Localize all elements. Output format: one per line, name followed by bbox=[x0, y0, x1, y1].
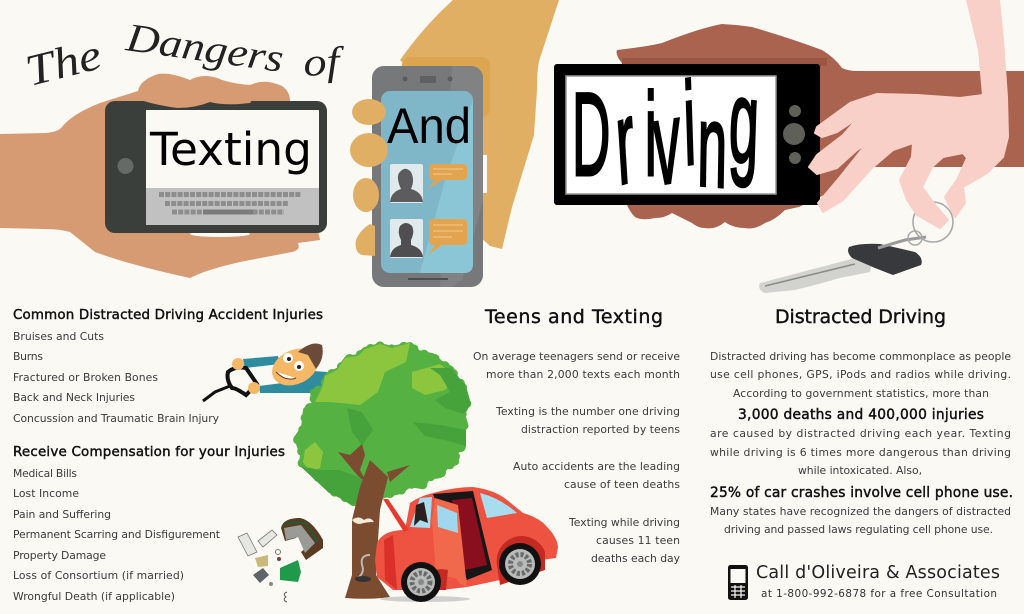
panel: teens and texting bbox=[473, 306, 681, 565]
text block: distracted driving intro bbox=[710, 350, 1011, 400]
contact: woman with message bbox=[390, 164, 467, 203]
keyboard bbox=[159, 194, 301, 212]
illustration: tree and crashed car bbox=[297, 343, 558, 602]
text block: teen facts: Texting while driving bbox=[568, 516, 680, 529]
call to action bbox=[756, 563, 1000, 600]
text block: distracted driving intro: According to government statistics, more than bbox=[733, 387, 989, 400]
contact: man with message bbox=[390, 219, 467, 258]
text block: distracted driving detail: while intoxicated. Also, bbox=[798, 464, 922, 477]
tree foliage bbox=[297, 343, 471, 505]
list: injuries: Back and Neck Injuries bbox=[13, 391, 135, 404]
text block: laws: driving and passed laws regulating cell phone use. bbox=[724, 523, 993, 536]
list: injuries: Fractured or Broken Bones bbox=[13, 371, 158, 384]
fingers bbox=[350, 99, 388, 256]
heading: compensation: Receive Compensation for your Injuries bbox=[13, 445, 285, 460]
word: Driving: Driving bbox=[572, 55, 761, 213]
text block: teen facts: causes 11 teen bbox=[596, 534, 680, 547]
list: compensation: Medical Bills bbox=[13, 467, 77, 480]
heading: teens and texting: Teens and Texting bbox=[484, 306, 663, 328]
call to action: Call d'Oliveira & Associates bbox=[756, 563, 1000, 583]
hand: yellow bbox=[400, 0, 559, 249]
text block: teen facts: Texting is the number one driving bbox=[495, 405, 680, 418]
word: And: And bbox=[387, 98, 471, 154]
illustration: driver with steering wheel bbox=[203, 341, 330, 401]
title: The Dangers of: Dangers bbox=[123, 14, 286, 81]
text block: laws bbox=[710, 505, 1011, 536]
trunk wound bbox=[352, 518, 374, 524]
heading: common injuries: Common Distracted Driving Accident Injuries bbox=[13, 308, 323, 323]
text block: teen facts: more than 2,000 texts each month bbox=[486, 368, 680, 381]
list: injuries: Burns bbox=[13, 350, 43, 363]
phone: And bbox=[372, 66, 483, 287]
hand: brown bbox=[617, 24, 1024, 228]
illustration: pale hand dangling keys bbox=[759, 0, 1008, 293]
list: injuries: Concussion and Traumatic Brain Injury bbox=[13, 412, 220, 425]
steering wheel bbox=[203, 386, 230, 401]
title: The Dangers of bbox=[21, 14, 346, 96]
key bbox=[759, 202, 953, 293]
list: injuries: Bruises and Cuts bbox=[13, 330, 104, 343]
illustration: hand holding Texting phone bbox=[0, 74, 327, 278]
text block: distracted driving detail: are caused by distracted driving each year. Texting bbox=[710, 427, 1011, 440]
call to action: at 1-800-992-6878 for a free Consultation bbox=[761, 588, 997, 600]
title: The Dangers of: of bbox=[302, 38, 346, 85]
list: compensation: Property Damage bbox=[13, 549, 106, 562]
illustration: hand holding Driving phone bbox=[554, 24, 1024, 228]
list: compensation: Pain and Suffering bbox=[13, 508, 111, 521]
stat: deaths and injuries: 3,000 deaths and 400,000 injuries bbox=[738, 407, 984, 423]
list: compensation bbox=[13, 467, 220, 603]
phone: Texting bbox=[105, 92, 327, 233]
text block: teen facts: distraction reported by teens bbox=[521, 423, 680, 436]
hand: tan bbox=[0, 74, 320, 278]
text block: distracted driving detail: while driving is 6 times more dangerous than driving bbox=[710, 446, 1011, 459]
list: compensation: Lost Income bbox=[13, 487, 79, 500]
text block: distracted driving detail bbox=[710, 427, 1011, 477]
hand: pale bbox=[809, 0, 1008, 228]
list: compensation: Permanent Scarring and Disfigurement bbox=[13, 528, 220, 541]
list: compensation: Loss of Consortium (if married) bbox=[13, 569, 184, 582]
icon: mobile phone bbox=[728, 565, 748, 600]
text block: teen facts bbox=[473, 350, 681, 565]
text block: teen facts: On average teenagers send or receive bbox=[473, 350, 680, 363]
illustration: wallet and money bbox=[238, 518, 323, 602]
word: Texting: Texting bbox=[149, 123, 312, 176]
panel: injuries and compensation lists bbox=[13, 308, 323, 603]
tree trunk bbox=[338, 444, 410, 599]
illustration: hand holding And phone bbox=[350, 0, 559, 287]
title: The Dangers of: The bbox=[21, 30, 106, 96]
text block: teen facts: cause of teen deaths bbox=[564, 478, 680, 491]
stat: car crashes: 25% of car crashes involve cell phone use. bbox=[710, 485, 1013, 501]
text block: teen facts: deaths each day bbox=[591, 552, 681, 565]
text block: distracted driving intro: Distracted driving has become commonplace as people bbox=[710, 350, 1011, 363]
car wheels bbox=[401, 543, 541, 602]
text block: teen facts: Auto accidents are the leading bbox=[513, 460, 680, 473]
car bbox=[355, 487, 558, 602]
text block: laws: Many states have recognized the dangers of distracted bbox=[710, 505, 1011, 518]
list: injuries bbox=[13, 330, 220, 425]
engine hose bbox=[358, 555, 370, 578]
list: compensation: Wrongful Death (if applicable) bbox=[13, 590, 175, 603]
heading: distracted driving: Distracted Driving bbox=[775, 306, 946, 328]
phone: Driving bbox=[554, 55, 820, 213]
panel: distracted driving bbox=[710, 306, 1013, 536]
text block: distracted driving intro: use cell phones, GPS, iPods and radios while driving. bbox=[710, 368, 1011, 381]
